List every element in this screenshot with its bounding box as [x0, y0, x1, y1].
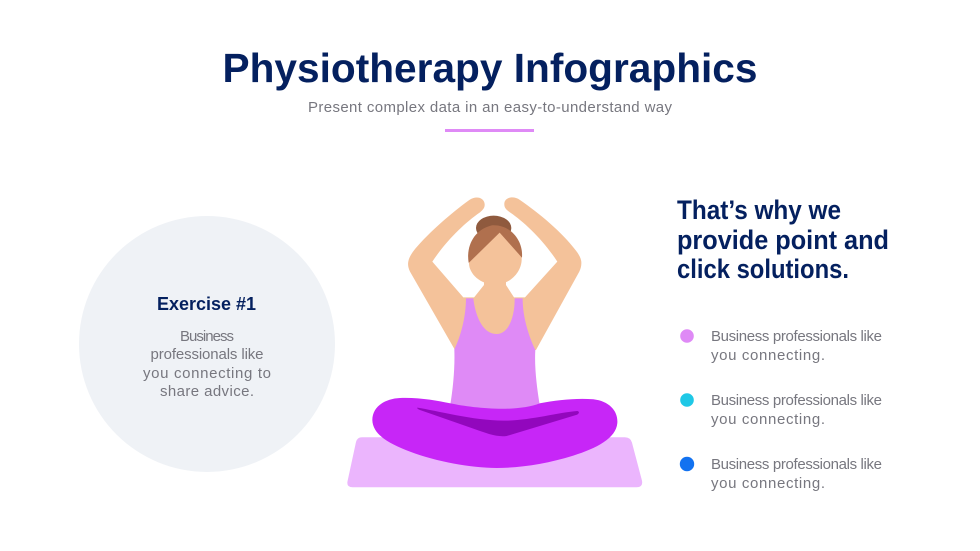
bullet item 3 — [680, 456, 882, 492]
exercise description: share advice. — [160, 383, 254, 400]
bullet text 1: Business professionals like — [711, 328, 882, 345]
bullet item 2 — [680, 392, 882, 428]
tank top — [450, 298, 540, 420]
hair — [468, 225, 522, 273]
title underline — [445, 129, 534, 132]
bullet text 2 — [711, 392, 882, 428]
neck and chest — [473, 277, 515, 337]
exercise heading: Exercise #1 — [157, 293, 256, 314]
crossed legs — [372, 398, 617, 468]
subtitle: Present complex data in an easy-to-understand way — [308, 99, 672, 116]
right heading: That’s why we — [677, 195, 841, 225]
hair bun — [476, 216, 511, 240]
bullet text 3 — [711, 456, 882, 492]
bullet text 2: Business professionals like — [711, 392, 882, 409]
bullet text 1 — [711, 328, 882, 364]
icon: blue dot — [680, 457, 694, 471]
right heading: click solutions. — [677, 254, 849, 284]
right heading — [677, 195, 889, 284]
exercise description: professionals like — [150, 346, 264, 363]
bullet item 1 — [680, 328, 882, 364]
icon: cyan dot — [680, 393, 694, 407]
exercise description — [143, 328, 271, 400]
arms and torso skin — [408, 197, 581, 350]
face — [469, 233, 522, 285]
bullet text 2: you connecting. — [711, 411, 825, 428]
title: Physiotherapy Infographics — [222, 45, 758, 91]
bullet text 1: you connecting. — [711, 347, 825, 364]
leg shadow — [417, 408, 579, 436]
panel: exercise circle — [79, 216, 335, 472]
right heading: provide point and — [677, 225, 889, 255]
illustration: woman meditating on a mat — [347, 197, 642, 487]
bullet text 3: Business professionals like — [711, 456, 882, 473]
exercise description: you connecting to — [143, 365, 271, 382]
yoga mat — [347, 437, 642, 487]
bullet text 3: you connecting. — [711, 475, 825, 492]
exercise description: Business — [180, 328, 234, 345]
icon: pink dot — [680, 329, 694, 343]
